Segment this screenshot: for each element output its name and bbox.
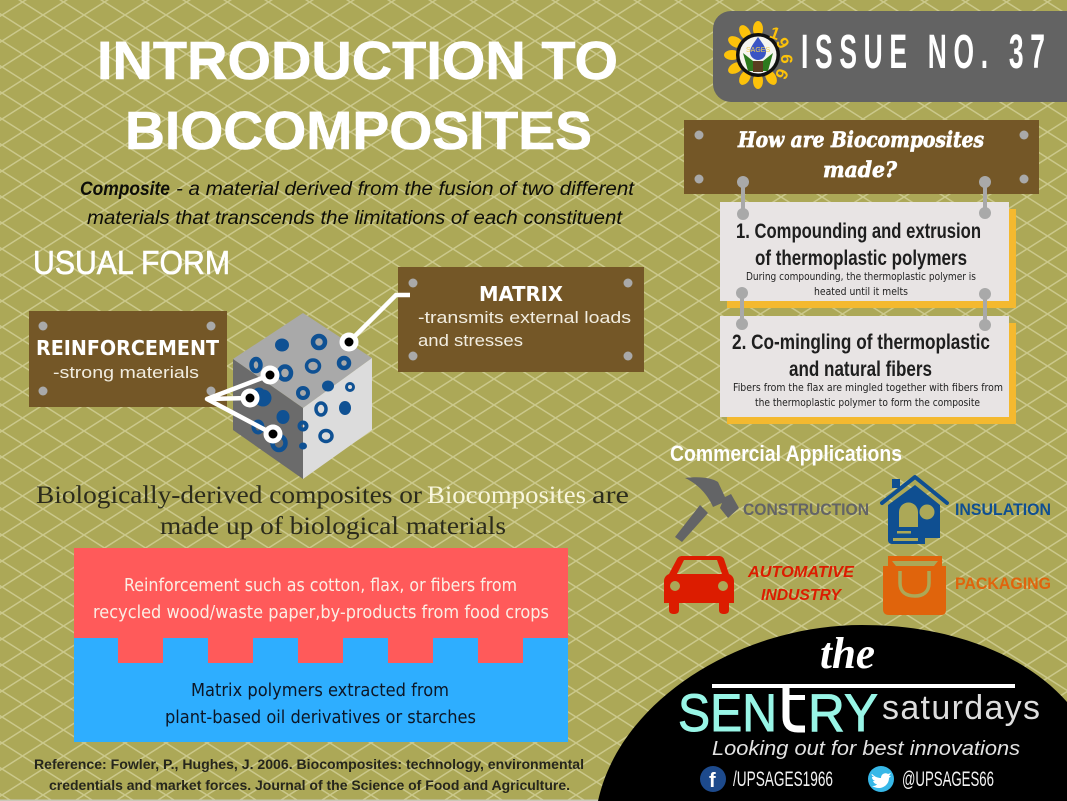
panel: how are biocomposites made — [684, 120, 1039, 194]
card: step 1: heated until it melts — [814, 285, 908, 298]
definition of composite — [80, 179, 635, 229]
pointers: reinforcement callouts — [207, 366, 282, 444]
panel: reinforcement: -strong materials — [53, 363, 199, 382]
footer: the sentry saturdays: RY — [808, 684, 878, 743]
panel: matrix: MATRIX — [479, 282, 564, 306]
label: packaging: PACKAGING — [955, 574, 1051, 593]
label: construction: CONSTRUCTION — [743, 500, 869, 519]
reference citation: Reference: Fowler, P., Hughes, J. 2006. Biocomposites: technology, environmental — [34, 757, 584, 772]
footer: the sentry saturdays: SEN — [678, 684, 777, 743]
banner: issue number — [713, 11, 1067, 102]
label: automative industry — [747, 564, 855, 604]
diagram: reinforcement and matrix interlock: recycled wood/waste paper,by-products from food crops — [93, 602, 549, 623]
icon: SAGES sunflower logo — [724, 21, 796, 89]
icon: shopping bag — [883, 556, 946, 615]
title — [97, 31, 618, 161]
footer: the sentry saturdays — [598, 625, 1067, 801]
text: biologically-derived composites: are — [592, 482, 629, 509]
card: step 1: of thermoplastic polymers — [755, 247, 967, 270]
panel: how are biocomposites made: made? — [823, 157, 898, 182]
text: biologically-derived composites: made up of biological materials — [160, 513, 506, 540]
diagram: reinforcement and matrix interlock: plant-based oil derivatives or starches — [165, 707, 476, 728]
label: automative industry: AUTOMATIVE — [747, 564, 855, 581]
icon: hammer — [675, 477, 739, 542]
panel: matrix — [398, 267, 644, 372]
card: step 2: the thermoplastic polymer to form the composite — [755, 396, 980, 409]
definition of composite: - a material derived from the fusion of two different — [176, 179, 635, 200]
diagram: reinforcement and matrix interlock: Matrix polymers extracted from — [191, 680, 449, 701]
social: facebook: f — [709, 770, 716, 792]
card: step 1 — [720, 202, 1016, 308]
text: biologically-derived composites — [36, 482, 629, 540]
card: step 1: 1. Compounding and extrusion — [736, 220, 981, 243]
icon: car — [664, 556, 734, 614]
diagram: reinforcement and matrix interlock: Reinforcement such as cotton, flax, or fibers from — [124, 575, 517, 596]
pointer: matrix callout — [340, 295, 410, 352]
footer: the sentry saturdays: saturdays — [882, 689, 1040, 727]
heading: usual form: USUAL FORM — [33, 244, 230, 281]
footer: the sentry saturdays: the — [820, 629, 875, 678]
card: step 1: During compounding, the thermoplastic polymer is — [746, 270, 976, 283]
icon: SAGES sunflower logo: 6 — [771, 66, 792, 82]
diagram: reinforcement and matrix interlock — [74, 548, 568, 742]
definition of composite: Composite — [80, 179, 170, 200]
label: automative industry: INDUSTRY — [761, 587, 842, 604]
panel: reinforcement: REINFORCEMENT — [36, 336, 219, 360]
reference citation — [34, 757, 584, 793]
title: BIOCOMPOSITES — [125, 101, 592, 161]
social: twitter — [868, 766, 994, 792]
icon: SAGES sunflower logo: 9 — [772, 34, 793, 52]
icon: house — [882, 477, 947, 544]
panel: matrix: and stresses — [418, 331, 523, 350]
definition of composite: materials that transcends the limitations of each constituent — [87, 208, 623, 229]
icon: SAGES sunflower logo: 1 — [767, 23, 783, 44]
social: facebook: /UPSAGES1966 — [733, 768, 833, 791]
social: twitter: @UPSAGES66 — [902, 768, 994, 791]
text: biologically-derived composites: Biologically-derived composites or — [36, 482, 423, 509]
connectors: hanging pins — [736, 176, 991, 331]
title: INTRODUCTION TO — [97, 31, 618, 91]
text: biologically-derived composites: Biocomposites — [427, 482, 586, 509]
card: step 2: 2. Co-mingling of thermoplastic — [732, 331, 990, 354]
card: step 2: Fibers from the flax are mingled together with fibers from — [733, 381, 1003, 394]
icon: SAGES sunflower logo: SAGES — [746, 47, 770, 54]
panel: reinforcement — [29, 311, 227, 407]
icon: SAGES sunflower logo: 6 — [777, 54, 796, 64]
card: step 2: and natural fibers — [789, 358, 932, 381]
banner: issue number: ISSUE NO. 37 — [801, 26, 1052, 79]
diagram: composite cube — [233, 313, 372, 479]
label: insulation: INSULATION — [955, 500, 1051, 519]
reference citation: credentials and market forces. Journal of the Science of Food and Agriculture. — [49, 778, 570, 793]
panel: matrix: -transmits external loads — [418, 308, 631, 327]
social: facebook — [700, 766, 833, 792]
panel: how are biocomposites made: How are Biocomposites — [737, 127, 984, 152]
footer: the sentry saturdays: Looking out for best innovations — [712, 738, 1020, 760]
heading: commercial applications: Commercial Applications — [670, 441, 902, 466]
card: step 2 — [720, 316, 1016, 424]
